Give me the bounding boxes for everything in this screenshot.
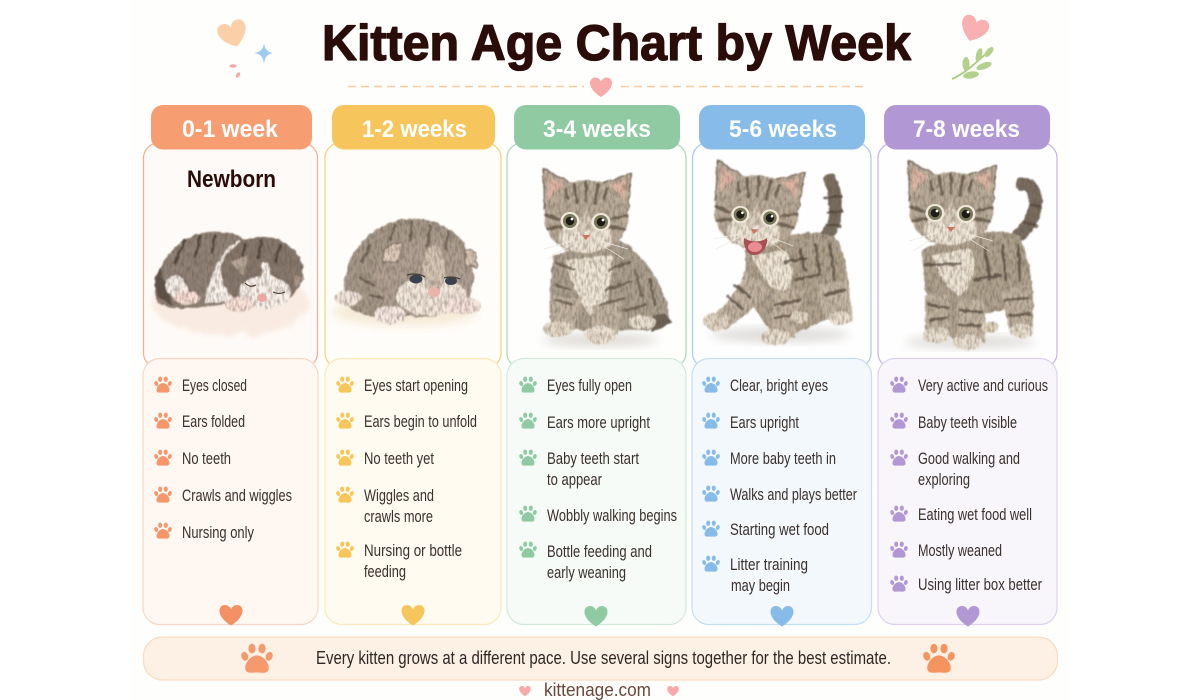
header: 0-1 week bbox=[151, 105, 312, 150]
website credit: kittenage.com bbox=[544, 680, 651, 700]
list card: 7-8 weeks: Using litter box better bbox=[918, 575, 1042, 594]
list card: 7-8 weeks: Eating wet food well bbox=[918, 505, 1032, 524]
subheading: Newborn: Newborn bbox=[187, 166, 276, 193]
list card: 3-4 weeks: Eyes fully open bbox=[547, 376, 632, 395]
list card: 5-6 weeks: Starting wet food bbox=[730, 520, 829, 539]
list card: 3-4 weeks: Ears more upright bbox=[547, 413, 650, 432]
list card: 3-4 weeks: Baby teeth start bbox=[547, 449, 639, 468]
banner message: Every kitten grows at a different pace. Use several signs together for the best estimate. bbox=[316, 647, 891, 668]
header: 1-2 weeks bbox=[332, 105, 495, 150]
list card: 5-6 weeks: may begin bbox=[731, 576, 790, 595]
list card: 5-6 weeks: Walks and plays better bbox=[730, 485, 857, 504]
list card: 5-6 weeks: More baby teeth in bbox=[730, 449, 836, 468]
list card: 1-2 weeks: Nursing or bottle bbox=[364, 541, 462, 560]
list card: 3-4 weeks: early weaning bbox=[547, 563, 626, 582]
icon: purple heart bbox=[956, 606, 980, 626]
panel: 1-2 weeks bbox=[325, 105, 501, 626]
list card: 1-2 weeks: No teeth yet bbox=[364, 449, 434, 468]
list card: 3-4 weeks: to appear bbox=[547, 470, 602, 489]
list card: 1-2 weeks: Wiggles and bbox=[364, 486, 434, 505]
list card: 1-2 weeks bbox=[325, 358, 501, 624]
list card: 5-6 weeks: Ears upright bbox=[730, 413, 799, 432]
kitten: eyes opening bbox=[333, 219, 481, 326]
list card: 7-8 weeks: Baby teeth visible bbox=[918, 413, 1017, 432]
list card: 7-8 weeks: Good walking and bbox=[918, 449, 1020, 468]
list card: 1-2 weeks: Eyes start opening bbox=[364, 376, 468, 395]
kitten: standing bbox=[905, 160, 1041, 350]
list card: 1-2 weeks: Ears begin to unfold bbox=[364, 412, 477, 431]
list card: 0-1 week bbox=[143, 358, 318, 624]
icon: blue heart bbox=[770, 606, 794, 626]
title: Kitten Age Chart by Week bbox=[322, 15, 911, 71]
decoration: right heart and sprig bbox=[952, 13, 995, 80]
list card: 5-6 weeks: Litter training bbox=[730, 555, 808, 574]
panel: 0-1 week bbox=[143, 105, 318, 626]
list card: 3-4 weeks: Wobbly walking begins bbox=[547, 506, 677, 525]
list card: 7-8 weeks bbox=[878, 358, 1057, 624]
list card: 3-4 weeks: Bottle feeding and bbox=[547, 542, 652, 561]
icon: left paw bbox=[240, 644, 274, 673]
icon: green heart bbox=[584, 606, 608, 626]
panel: 3-4 weeks bbox=[507, 105, 686, 626]
header: 5-6 weeks bbox=[699, 105, 865, 150]
panel: 7-8 weeks bbox=[878, 105, 1057, 626]
decoration: left heart and sparkle bbox=[215, 18, 273, 78]
list card: 0-1 week: No teeth bbox=[182, 449, 231, 468]
list card: 3-4 weeks bbox=[507, 358, 686, 624]
list card: 5-6 weeks: Clear, bright eyes bbox=[730, 376, 828, 395]
divider with heart bbox=[348, 78, 866, 97]
list card: 7-8 weeks: Mostly weaned bbox=[918, 541, 1002, 560]
list card: 7-8 weeks: Very active and curious bbox=[918, 376, 1048, 395]
header: 3-4 weeks bbox=[514, 105, 680, 150]
list card: 0-1 week: Nursing only bbox=[182, 523, 254, 542]
panel: 5-6 weeks bbox=[692, 105, 872, 626]
icon: yellow heart bbox=[401, 605, 425, 626]
list card: 0-1 week: Crawls and wiggles bbox=[182, 486, 292, 505]
header: 5-6 weeks: 5-6 weeks bbox=[729, 116, 837, 143]
footer banner bbox=[144, 637, 1058, 680]
kitten: newborn sleeping bbox=[153, 232, 309, 336]
header: 1-2 weeks: 1-2 weeks bbox=[362, 116, 467, 143]
icon: right paw bbox=[922, 644, 956, 673]
list card: 1-2 weeks: feeding bbox=[364, 562, 406, 581]
kitten: walking and playing bbox=[703, 159, 852, 345]
header: 7-8 weeks bbox=[884, 105, 1050, 150]
list card: 1-2 weeks: crawls more bbox=[364, 507, 433, 526]
icon: orange heart bbox=[219, 605, 243, 626]
page background bbox=[130, 0, 1070, 700]
header: 0-1 week: 0-1 week bbox=[182, 116, 279, 143]
kitten: sitting bbox=[542, 168, 672, 346]
list card: 7-8 weeks: exploring bbox=[918, 470, 970, 489]
header: 7-8 weeks: 7-8 weeks bbox=[913, 116, 1020, 143]
list card: 5-6 weeks bbox=[692, 358, 872, 624]
header: 3-4 weeks: 3-4 weeks bbox=[543, 116, 651, 143]
list card: 0-1 week: Eyes closed bbox=[182, 376, 247, 395]
list card: 0-1 week: Ears folded bbox=[182, 412, 245, 431]
